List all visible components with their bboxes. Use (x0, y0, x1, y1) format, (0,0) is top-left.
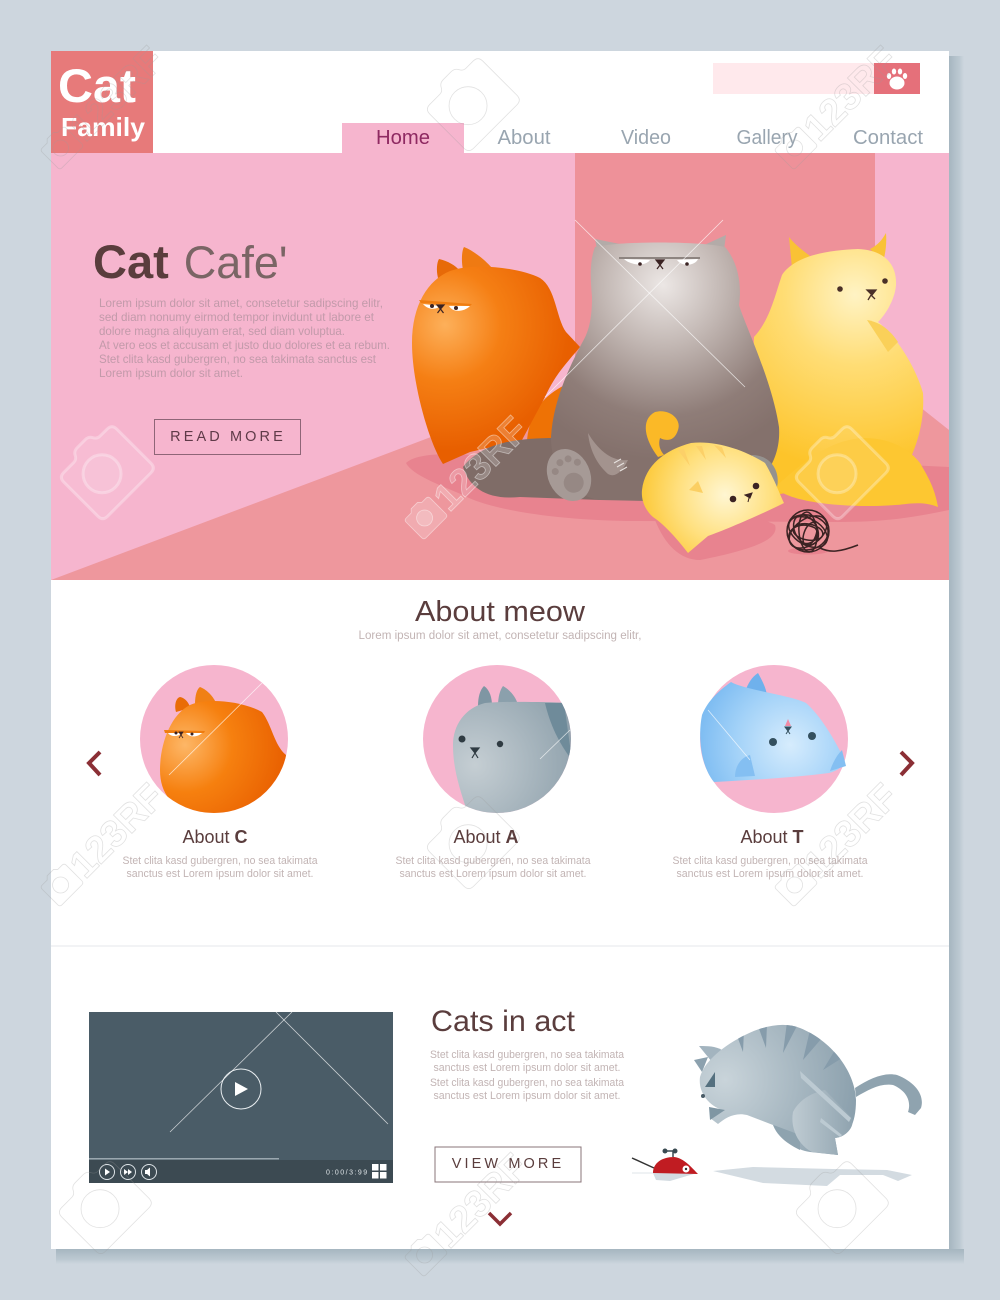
search box (713, 63, 920, 94)
ball of yarn (783, 509, 858, 555)
about section heading: About meow (415, 596, 586, 628)
description: About C: Stet clita kasd gubergren, no sea takimata (122, 855, 318, 867)
description: About C: sanctus est Lorem ipsum dolor sit amet. (126, 868, 314, 880)
description: About T: sanctus est Lorem ipsum dolor sit amet. (676, 868, 864, 880)
label: About A: About A (453, 827, 519, 847)
video player (89, 1012, 393, 1183)
description: About A: sanctus est Lorem ipsum dolor sit amet. (400, 868, 586, 880)
icon: forward control (120, 1164, 136, 1180)
paw (539, 442, 599, 508)
profile: orange cat (140, 665, 288, 815)
section paragraph: sanctus est Lorem ipsum dolor sit amet. (434, 1062, 620, 1074)
icon: volume control (142, 1164, 156, 1180)
description: About A: Stet clita kasd gubergren, no sea takimata (396, 855, 591, 867)
section paragraph: Stet clita kasd gubergren, no sea takimata (430, 1077, 625, 1089)
section paragraph: Stet clita kasd gubergren, no sea takimata (430, 1049, 625, 1061)
watermarks: 123RF (62, 39, 172, 149)
label: About C: About C (182, 827, 248, 847)
navigation: Gallery (736, 127, 798, 149)
arrow: next (901, 752, 912, 775)
icon: paw (887, 68, 907, 90)
hero paragraph: Lorem ipsum dolor sit amet. (99, 366, 243, 380)
description: About T (672, 855, 868, 880)
kitten (642, 411, 784, 553)
watermarks: 123RF (426, 409, 536, 519)
section heading: Cats in act (431, 1005, 576, 1038)
hero background (51, 153, 949, 580)
navigation: About (498, 127, 551, 149)
gray cat tail tip (750, 455, 778, 498)
description: About T: Stet clita kasd gubergren, no sea takimata (672, 855, 868, 867)
hero paragraph: Stet clita kasd gubergren, no sea takimata sanctus est (99, 352, 377, 366)
section paragraph (430, 1049, 625, 1102)
profile: gray cat (423, 665, 571, 813)
hero heading: Cat Cafe' (93, 235, 287, 288)
orange cat (412, 247, 580, 464)
gray cat (463, 235, 779, 508)
back wall (575, 153, 875, 453)
tabby cat (694, 1022, 922, 1155)
navigation (342, 123, 923, 154)
floor shadow (406, 454, 949, 522)
about section subheading: Lorem ipsum dolor sit amet, consetetur sadipscing elitr, (358, 630, 642, 642)
view more button: VIEW MORE (452, 1156, 564, 1172)
floor (51, 390, 949, 580)
hero panel (51, 153, 949, 580)
kitten shadow (655, 512, 776, 560)
logo: Family (61, 112, 146, 142)
arrow: scroll down (489, 1213, 511, 1224)
description: About C (122, 855, 318, 880)
watermarks: 123RF (796, 776, 906, 886)
label: About T: About T (740, 827, 804, 847)
navigation: Home (376, 127, 430, 149)
section paragraph: sanctus est Lorem ipsum dolor sit amet. (434, 1090, 620, 1102)
time readout: 0:00/3:99 (326, 1170, 369, 1176)
toy mouse (632, 1148, 698, 1181)
watermarks: 123RF (62, 776, 172, 886)
hero paragraph: At vero eos et accusam et justo duo dolores et ea rebum. (99, 338, 390, 352)
navigation: Video (621, 127, 671, 149)
watermarks: 123RF (426, 1146, 536, 1256)
watermarks: 123RF (796, 39, 906, 149)
read more button (154, 420, 300, 454)
description: About A (396, 855, 591, 880)
icon: fullscreen grid (372, 1164, 386, 1178)
tabby cat shadow (713, 1167, 912, 1186)
navigation: Contact (853, 127, 923, 149)
icon: play control (100, 1164, 114, 1180)
hero paragraph: Lorem ipsum dolor sit amet, consetetur sadipscing elitr, (99, 296, 383, 310)
logo (51, 51, 153, 153)
hero paragraph (99, 296, 390, 380)
read more button: READ MORE (170, 429, 286, 445)
hero paragraph: sed diam nonumy eirmod tempor invidunt ut labore et (99, 310, 375, 324)
logo: Cat (58, 59, 136, 112)
yellow cat (754, 233, 938, 507)
profile: blue cat (700, 665, 848, 813)
icon: main play (221, 1069, 261, 1109)
arrow: previous (89, 752, 100, 775)
view more button (435, 1147, 581, 1182)
tabby stripes (736, 1022, 842, 1070)
hero paragraph: dolore magna aliquyam erat, sed diam voluptua. (99, 324, 345, 338)
